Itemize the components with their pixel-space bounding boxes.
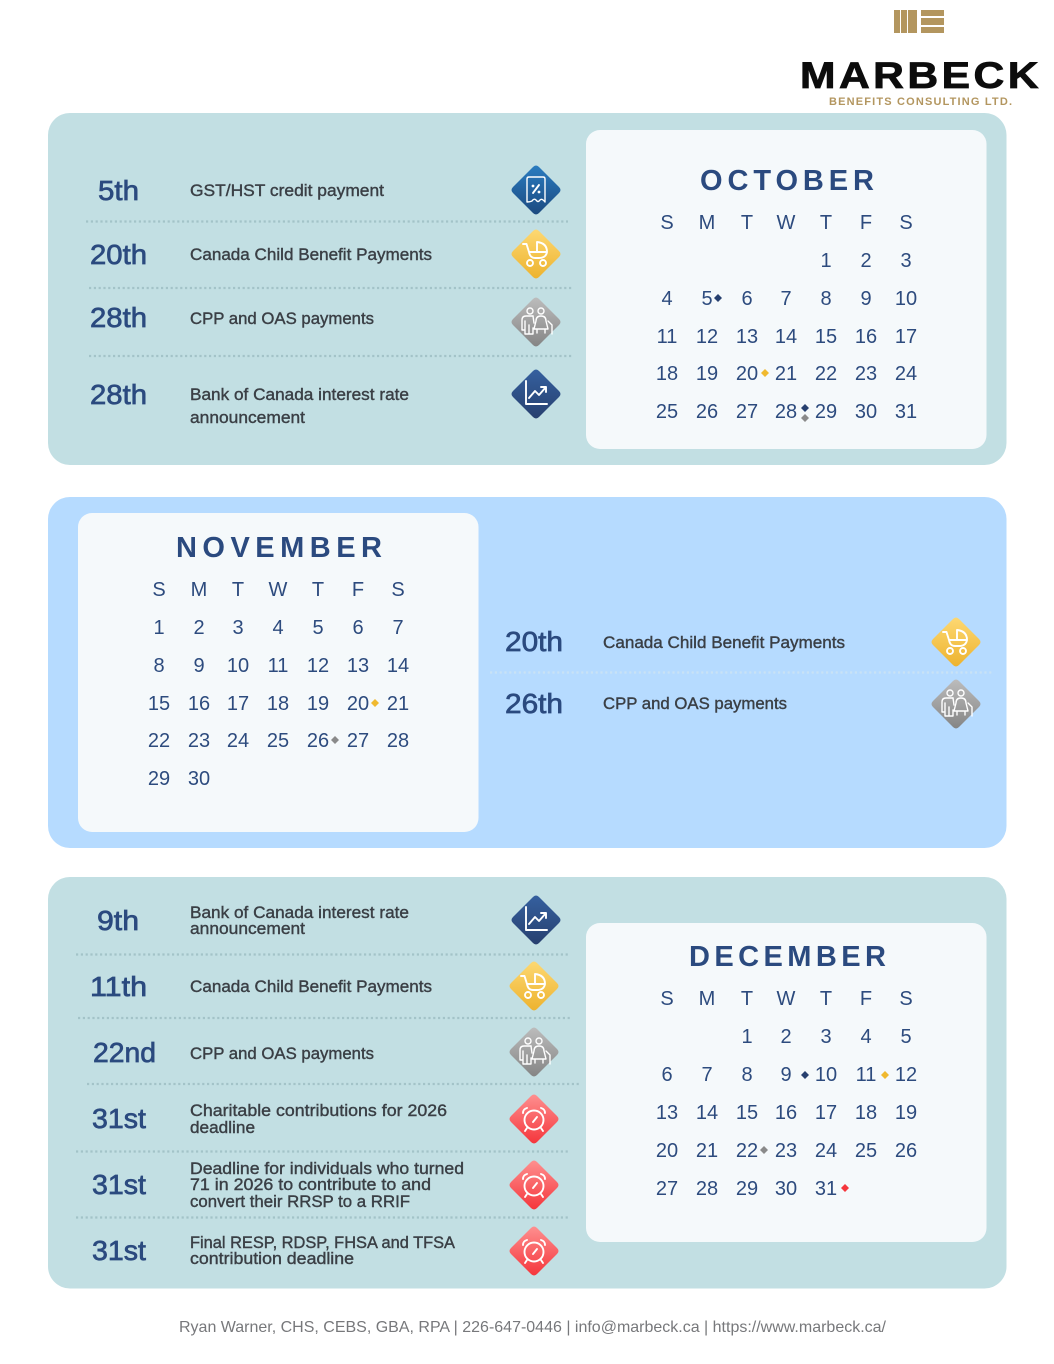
event: 28th Bank of Canada: Bank of Canada interest rate: [190, 385, 409, 404]
event: 31st RRSP deadline: 31st: [92, 1169, 146, 1200]
event: 5th GST/HST: [98, 175, 384, 206]
icon: seniors: [932, 680, 980, 728]
november grid: 23: [188, 730, 210, 752]
icon: alarm clock: [510, 1160, 558, 1210]
october grid: 6: [741, 288, 753, 310]
october grid: 26: [696, 401, 718, 423]
december title: DECEMBER: [689, 941, 886, 973]
event: 31st charitable contributions: 31st: [92, 1103, 146, 1134]
event: 22nd CPP and OAS: CPP and OAS payments: [190, 1044, 374, 1063]
icon: rate chart: [512, 896, 560, 944]
october grid: 11: [657, 326, 677, 348]
november grid: 12: [307, 655, 329, 677]
october grid: 12: [696, 326, 718, 348]
event: 20th Canada Child Benefit: Canada Child Benefit Payments: [190, 245, 432, 264]
icon: GST receipt: [512, 166, 560, 214]
october grid: M: [699, 212, 715, 234]
december grid: 2: [780, 1026, 792, 1048]
november grid: F: [352, 579, 364, 601]
logo: Marbeck: [800, 10, 1042, 108]
event: 20th Canada Child Benefit: [505, 626, 845, 657]
event: 28th Bank of Canada: [90, 379, 409, 427]
event: 22nd CPP and OAS: 22nd: [93, 1037, 156, 1068]
panel: october: [48, 113, 1006, 465]
event: 11th Canada Child Benefit: [90, 971, 432, 1002]
november grid: 19: [307, 693, 329, 715]
november grid: M: [191, 579, 207, 601]
october grid: 19: [696, 363, 718, 385]
december grid: 9: [780, 1064, 792, 1086]
december grid: 7: [701, 1064, 713, 1086]
december grid: [656, 988, 917, 1200]
event: 31st RESP RDSP FHSA TFSA: contribution deadline: [190, 1249, 354, 1268]
december grid: S: [660, 988, 674, 1010]
event: 11th Canada Child Benefit: 11th: [90, 971, 147, 1002]
panel: december: [48, 877, 1006, 1288]
october grid: 27: [736, 401, 758, 423]
event: 9th Bank of Canada: [97, 903, 409, 938]
icon: stroller: [932, 618, 980, 666]
november grid: 18: [267, 693, 289, 715]
icon: seniors: [512, 298, 560, 346]
logo tagline: BENEFITS CONSULTING LTD.: [829, 96, 1012, 108]
calendar: november: [78, 513, 478, 832]
event: 28th CPP and OAS: [90, 302, 374, 333]
november grid: 9: [193, 655, 205, 677]
december grid: 5: [900, 1026, 912, 1048]
october grid: 22: [815, 363, 837, 385]
october grid: 21: [775, 363, 797, 385]
october grid: 18: [656, 363, 678, 385]
october grid: T: [820, 212, 832, 234]
november grid: 21: [387, 693, 409, 715]
event: 5th GST/HST: 5th: [98, 175, 139, 206]
icon: stroller: [510, 962, 558, 1010]
november grid: [148, 579, 409, 790]
event: 28th Bank of Canada: 28th: [90, 379, 147, 410]
october grid: 24: [895, 363, 917, 385]
november title: NOVEMBER: [176, 532, 382, 564]
december grid: 30: [775, 1178, 797, 1200]
october date markers: [714, 294, 809, 422]
december grid: 16: [775, 1102, 797, 1124]
event: 31st RESP RDSP FHSA TFSA: Final RESP, RDSP, FHSA and TFSA: [190, 1233, 456, 1252]
november grid: 2: [193, 617, 205, 639]
december grid: 25: [855, 1140, 877, 1162]
october grid: 10: [895, 288, 917, 310]
november grid: 20: [347, 693, 369, 715]
october grid: 31: [895, 401, 917, 423]
december grid: 22: [736, 1140, 758, 1162]
event: 26th CPP and OAS: 26th: [505, 688, 563, 719]
footer contact line: Ryan Warner, CHS, CEBS, GBA, RPA | 226-647-0446 | info@marbeck.ca | https://www.marbeck.ca/: [179, 1319, 887, 1336]
icon: alarm clock: [510, 1094, 558, 1144]
december grid: T: [820, 988, 832, 1010]
event: 31st RRSP deadline: [92, 1159, 464, 1211]
logo wordmark: MARBECK: [800, 55, 1042, 96]
event: 28th CPP and OAS: 28th: [90, 302, 147, 333]
december grid: 1: [741, 1026, 753, 1048]
logo mark: [894, 10, 944, 33]
december grid: 26: [895, 1140, 917, 1162]
event: 5th GST/HST: GST/HST credit payment: [190, 181, 384, 200]
november panel background: [48, 497, 1006, 848]
october card: [586, 130, 986, 449]
november grid: 30: [188, 768, 210, 790]
event: 31st RRSP deadline: Deadline for individuals who turned: [190, 1159, 464, 1178]
event: 31st charitable contributions: [92, 1101, 447, 1137]
december grid: 31: [815, 1178, 837, 1200]
event: 31st RESP RDSP FHSA TFSA: 31st: [92, 1235, 146, 1266]
december panel background: [48, 877, 1006, 1288]
event: 31st RRSP deadline: 71 in 2026 to contribute to and: [190, 1175, 431, 1194]
december grid: 24: [815, 1140, 837, 1162]
november grid: 28: [387, 730, 409, 752]
icon: stroller: [512, 230, 560, 278]
november grid: T: [312, 579, 324, 601]
december grid: 15: [736, 1102, 758, 1124]
december grid: 14: [696, 1102, 718, 1124]
october grid: 20: [736, 363, 758, 385]
october grid: 13: [736, 326, 758, 348]
october grid: 29: [815, 401, 837, 423]
event: 9th Bank of Canada: Bank of Canada interest rate: [190, 903, 409, 922]
october grid: S: [660, 212, 674, 234]
october grid: T: [741, 212, 753, 234]
november grid: 1: [153, 617, 165, 639]
october grid: S: [899, 212, 913, 234]
october grid: 16: [855, 326, 877, 348]
october grid: 30: [855, 401, 877, 423]
november grid: W: [269, 579, 288, 601]
event: 26th CPP and OAS: [505, 688, 787, 719]
october grid: 9: [860, 288, 872, 310]
october grid: 8: [820, 288, 832, 310]
october grid: 28: [775, 401, 797, 423]
november grid: 13: [347, 655, 369, 677]
november grid: 26: [307, 730, 329, 752]
october grid: 14: [775, 326, 797, 348]
december grid: 19: [895, 1102, 917, 1124]
october grid: W: [777, 212, 796, 234]
november grid: 16: [188, 693, 210, 715]
december grid: 4: [860, 1026, 872, 1048]
november card: [78, 513, 478, 832]
october grid: 17: [895, 326, 917, 348]
november grid: 24: [227, 730, 249, 752]
october grid: 15: [815, 326, 837, 348]
december grid: 13: [656, 1102, 678, 1124]
november grid: 3: [232, 617, 244, 639]
december grid: M: [699, 988, 715, 1010]
icon: alarm clock: [510, 1226, 558, 1276]
december date markers: [760, 1071, 889, 1192]
november grid: 5: [312, 617, 324, 639]
december grid: 3: [820, 1026, 832, 1048]
december grid: T: [741, 988, 753, 1010]
event: 20th Canada Child Benefit: 20th: [90, 239, 147, 270]
event: 31st RESP RDSP FHSA TFSA: [92, 1233, 456, 1268]
october grid: 1: [820, 250, 832, 272]
panel: november: [48, 497, 1006, 848]
october grid: [656, 212, 917, 423]
october grid: 3: [900, 250, 912, 272]
october grid: 7: [780, 288, 792, 310]
november grid: 8: [153, 655, 165, 677]
october grid: 4: [661, 288, 673, 310]
december grid: 10: [815, 1064, 837, 1086]
november grid: 25: [267, 730, 289, 752]
december grid: 11: [856, 1064, 876, 1086]
calendar: december: [586, 923, 986, 1242]
calendar: october: [586, 130, 986, 449]
december grid: S: [899, 988, 913, 1010]
december grid: 21: [696, 1140, 718, 1162]
october grid: F: [860, 212, 872, 234]
november grid: 7: [392, 617, 404, 639]
october grid: 23: [855, 363, 877, 385]
event: 9th Bank of Canada: announcement: [190, 919, 305, 938]
december grid: 29: [736, 1178, 758, 1200]
november grid: 14: [387, 655, 409, 677]
event: 11th Canada Child Benefit: Canada Child Benefit Payments: [190, 977, 432, 996]
november grid: 11: [268, 655, 288, 677]
december grid: 17: [815, 1102, 837, 1124]
event: 26th CPP and OAS: CPP and OAS payments: [603, 694, 787, 713]
december grid: W: [777, 988, 796, 1010]
november grid: S: [391, 579, 405, 601]
october panel background: [48, 113, 1006, 465]
november grid: 17: [227, 693, 249, 715]
december grid: 18: [855, 1102, 877, 1124]
november grid: 15: [148, 693, 170, 715]
icon: seniors: [510, 1028, 558, 1076]
event: 22nd CPP and OAS: [93, 1037, 374, 1068]
november grid: S: [152, 579, 166, 601]
november grid: 10: [227, 655, 249, 677]
november grid: 22: [148, 730, 170, 752]
october grid: 5: [701, 288, 713, 310]
december grid: 8: [741, 1064, 753, 1086]
november grid: T: [232, 579, 244, 601]
november grid: 27: [347, 730, 369, 752]
october grid: 25: [656, 401, 678, 423]
december grid: 12: [895, 1064, 917, 1086]
event: 28th Bank of Canada: announcement: [190, 408, 305, 427]
event: 20th Canada Child Benefit: Canada Child Benefit Payments: [603, 633, 845, 652]
icon: rate chart: [512, 370, 560, 418]
event: 20th Canada Child Benefit: 20th: [505, 626, 563, 657]
december grid: 23: [775, 1140, 797, 1162]
event: 31st charitable contributions: deadline: [190, 1118, 255, 1137]
event: 31st charitable contributions: Charitable contributions for 2026: [190, 1101, 447, 1120]
december grid: 6: [661, 1064, 673, 1086]
november grid: 4: [272, 617, 284, 639]
december grid: 20: [656, 1140, 678, 1162]
november grid: 29: [148, 768, 170, 790]
december grid: F: [860, 988, 872, 1010]
october title: OCTOBER: [700, 165, 874, 197]
event: 9th Bank of Canada: 9th: [97, 905, 139, 936]
event: 31st RRSP deadline: convert their RRSP to a RRIF: [190, 1192, 410, 1211]
event: 28th CPP and OAS: CPP and OAS payments: [190, 309, 374, 328]
december grid: 27: [656, 1178, 678, 1200]
december card: [586, 923, 986, 1242]
october grid: 2: [860, 250, 872, 272]
event: 20th Canada Child Benefit: [90, 239, 432, 270]
november grid: 6: [352, 617, 364, 639]
december grid: 28: [696, 1178, 718, 1200]
november date markers: [331, 699, 379, 744]
